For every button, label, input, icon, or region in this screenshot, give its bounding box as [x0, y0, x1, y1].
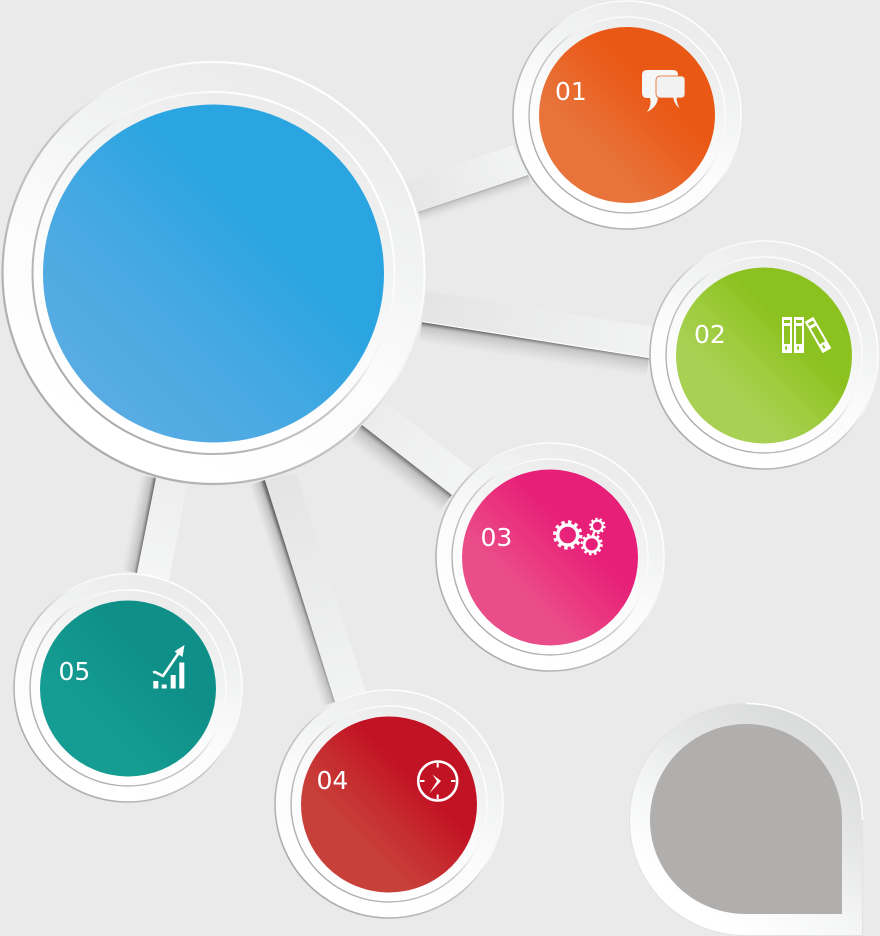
- connector: hub to 05: [121, 475, 187, 580]
- teardrop panel: [630, 704, 862, 936]
- number 01: 01: [555, 77, 587, 106]
- number 02: 02: [694, 320, 726, 349]
- hub circle: [2, 62, 424, 484]
- node 03: pink: [436, 443, 664, 671]
- node 02: green: [650, 241, 878, 469]
- icon: clock: [418, 762, 457, 800]
- number 05: 05: [58, 657, 90, 686]
- connector: hub to 01: [407, 145, 532, 223]
- connector: hub to 02: [419, 291, 652, 378]
- connector: hub to 03: [348, 400, 473, 512]
- node 05: teal: [14, 574, 242, 802]
- connector: hub to 04: [250, 473, 366, 707]
- node 01: orange: [513, 1, 741, 229]
- icon: binders: [782, 317, 831, 353]
- node 04: red: [275, 690, 503, 918]
- number 03: 03: [480, 523, 512, 552]
- icon: gears: [555, 519, 604, 554]
- icon: growth chart: [153, 645, 184, 688]
- icon: speech bubbles: [642, 70, 685, 112]
- number 04: 04: [316, 766, 348, 795]
- teardrop inner fill: [650, 724, 842, 914]
